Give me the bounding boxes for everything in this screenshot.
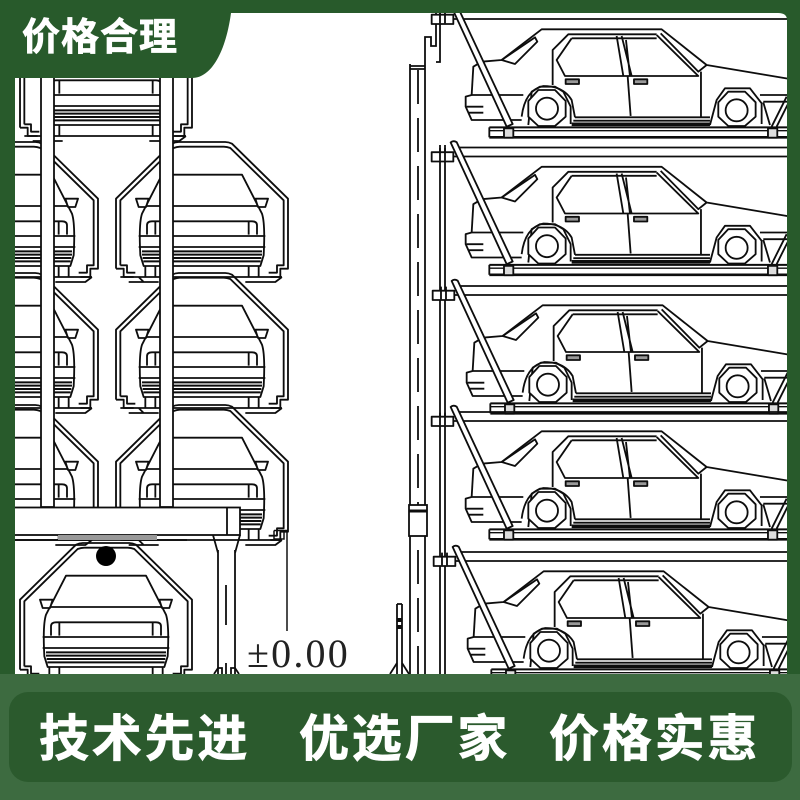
ground post	[213, 535, 240, 674]
bottom text: preferred manufacturer: 优选厂家	[299, 711, 510, 767]
ground level label: ±0.00	[247, 631, 350, 676]
black pivot dot	[96, 546, 116, 566]
side-view car row: car 1	[432, 4, 790, 138]
tower base platform	[10, 508, 240, 540]
ground-level car in pit	[20, 543, 192, 683]
tower posts	[41, 70, 173, 507]
tall guide rails between towers and side cars	[390, 13, 445, 674]
left tower: front-view cars	[15, 78, 289, 546]
side-view car row: car 5	[434, 546, 792, 680]
bottom band	[0, 674, 800, 800]
bottom text: good price: 价格实惠	[549, 711, 760, 767]
bottom text: advanced technology: 技术先进	[39, 711, 250, 767]
side-view car row: car 3	[433, 280, 791, 414]
side-view car row: car 4	[432, 406, 790, 540]
title tab background	[0, 0, 231, 78]
bottom inner panel	[9, 692, 792, 782]
title: 价格合理	[22, 17, 178, 59]
dimension leader line	[274, 530, 287, 631]
side-view car row: car 2	[432, 141, 790, 275]
